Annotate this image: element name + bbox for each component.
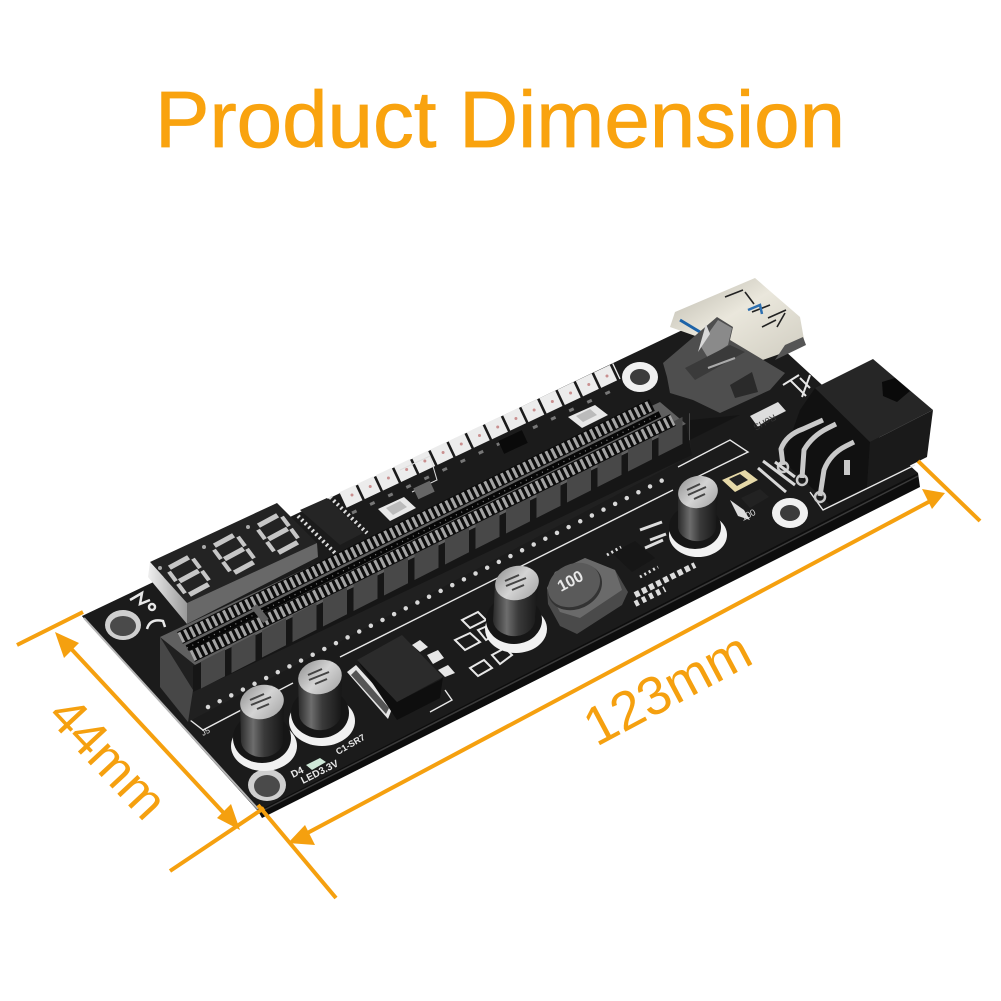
inductor [540, 555, 628, 634]
slot left end [160, 637, 193, 722]
length extension tick right [918, 461, 980, 521]
slot ribs [201, 427, 690, 675]
silkscreen labels: LED3.3V [299, 758, 341, 787]
power connector [782, 359, 933, 505]
display front [187, 543, 318, 624]
silkscreen outlines [190, 440, 915, 730]
tactile buttons [378, 405, 608, 521]
title: Product Dimension [155, 75, 845, 164]
decimal points [158, 525, 250, 570]
slot key [254, 606, 266, 621]
capacitor C2 [289, 656, 355, 746]
mosfet [347, 635, 455, 720]
length extension tick bottom [258, 805, 336, 898]
seven segment display [148, 503, 318, 624]
slot lower contacts [192, 420, 673, 656]
IC chip [298, 430, 528, 553]
plastic clip tab [663, 317, 785, 440]
small control chip [607, 522, 695, 604]
usb port [670, 278, 806, 362]
digit 2 [212, 534, 256, 574]
capacitor C3 [485, 562, 547, 653]
dimension lines [17, 461, 980, 898]
slot upper contacts [180, 405, 652, 638]
rohs and logo marks [750, 375, 810, 432]
mounting holes [105, 362, 808, 801]
pcb board [82, 305, 920, 818]
slot channel [187, 414, 660, 648]
123mm arrow shaft [298, 498, 936, 838]
connector notch [882, 378, 910, 402]
display top [150, 503, 317, 603]
silkscreen labels: C1-SR7 [334, 732, 367, 757]
digit 3 [256, 514, 300, 554]
fuse and small parts: 100 [739, 507, 757, 523]
inductor: 100 [555, 568, 587, 596]
slot top surface [160, 402, 686, 665]
slot front face [193, 424, 692, 692]
width extension tick bottom [170, 808, 264, 871]
label: 44mm: 44mm [37, 686, 178, 831]
label: 123mm: 123mm [574, 620, 761, 758]
fuse and small parts [722, 461, 795, 523]
silkscreen labels: D4 [289, 765, 306, 781]
rohs and logo marks: RoHS [752, 412, 778, 432]
capacitor C4 [669, 472, 727, 557]
pin row [208, 480, 663, 707]
connector left interior [782, 388, 870, 505]
capacitor C1 [231, 681, 297, 771]
circuit board riser [82, 278, 933, 818]
connector top [815, 359, 933, 442]
silkscreen labels [200, 726, 367, 787]
arrowheads [55, 489, 945, 845]
PCIe slot [160, 402, 692, 722]
connector pins [778, 420, 854, 502]
digit 1 [167, 556, 211, 596]
44mm arrow shaft [63, 640, 233, 823]
silkscreen labels: J5 [200, 726, 212, 738]
slot base and side [160, 402, 692, 722]
smd resistor cluster [455, 612, 512, 676]
width extension tick left [17, 612, 83, 645]
LED indicator row [343, 371, 622, 513]
top left smd parts [130, 593, 165, 629]
display left side [148, 562, 187, 624]
connector right face [867, 410, 933, 487]
